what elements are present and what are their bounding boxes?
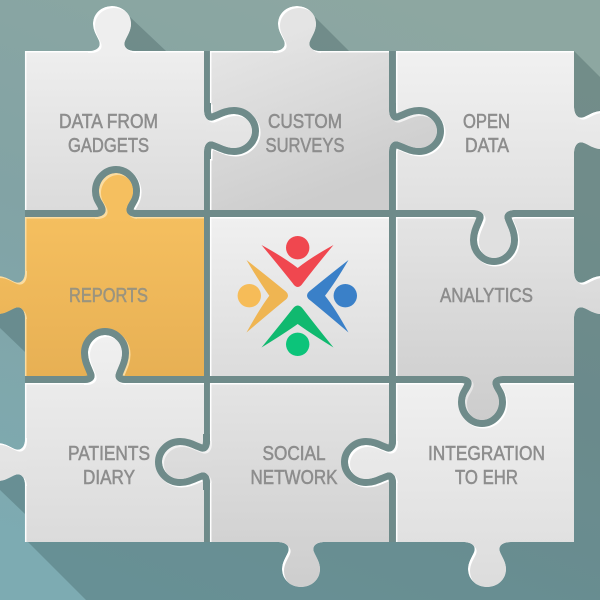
label: custom surveys: SURVEYS (266, 135, 344, 157)
label: custom surveys: CUSTOM (268, 111, 342, 133)
label: social network: NETWORK (250, 467, 338, 489)
icon: red person (262, 236, 334, 287)
interlocking tab outlines (84, 110, 516, 484)
label: patients diary (68, 443, 150, 489)
label: patients diary: DIARY (83, 467, 135, 489)
label: integration to ehr: INTEGRATION (428, 443, 545, 465)
label: integration to ehr: TO EHR (455, 467, 518, 489)
label: open data: DATA (465, 135, 510, 157)
label: patients diary: PATIENTS (68, 443, 150, 465)
icon: green person (262, 306, 334, 356)
icon: yellow person (238, 260, 288, 332)
label: data from gadgets: DATA FROM (59, 111, 158, 133)
label: analytics: ANALYTICS (440, 285, 533, 307)
label: reports: REPORTS (69, 285, 148, 307)
label: social network (250, 443, 338, 489)
label: integration to ehr (428, 443, 545, 489)
icon: blue person (307, 260, 357, 332)
label: open data (463, 111, 510, 157)
label: data from gadgets: GADGETS (68, 135, 149, 157)
label: social network: SOCIAL (262, 443, 326, 465)
central logo: four people (238, 236, 357, 356)
gap lines between pieces (25, 51, 574, 542)
puzzle piece bases (25, 51, 574, 542)
label: custom surveys (266, 111, 344, 157)
label: open data: OPEN (463, 111, 510, 133)
label: data from gadgets (59, 111, 158, 157)
